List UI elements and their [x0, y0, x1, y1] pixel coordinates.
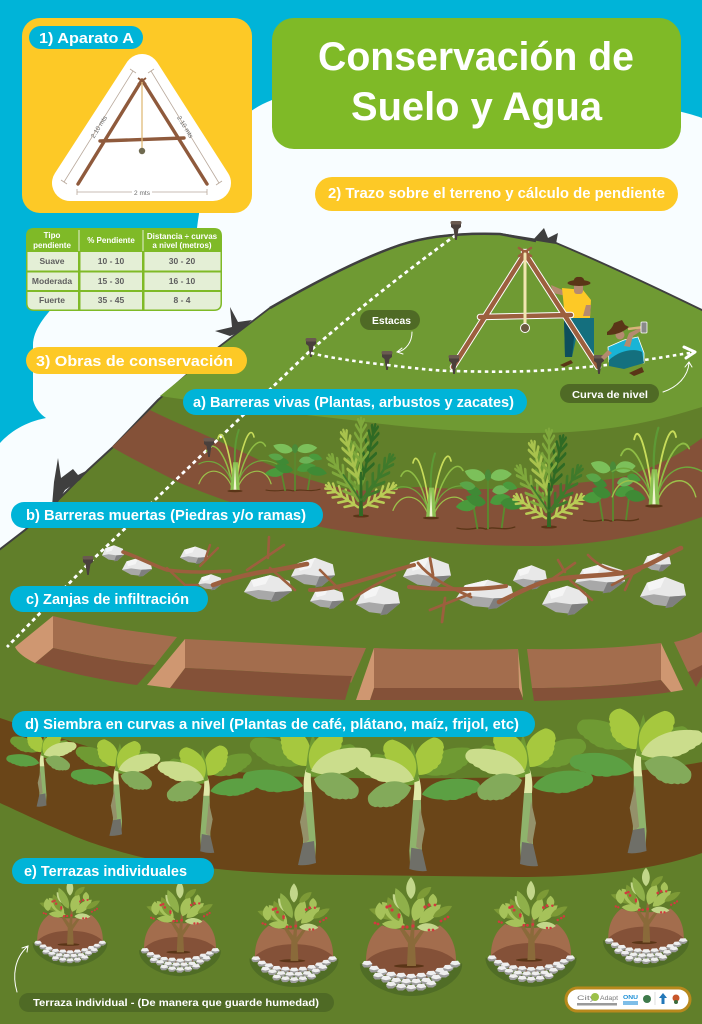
slope table: a nivel (metros) [152, 241, 212, 250]
brown band of live barriers [112, 410, 702, 546]
slope table: 30 - 20 [169, 256, 196, 266]
level curve arrow [311, 347, 695, 372]
heading a pill: a) Barreras vivas (Plantas, arbustos y zacates) [193, 395, 514, 411]
individual terraces with coffee plants [33, 868, 689, 996]
live barrier plants [199, 418, 702, 529]
banana plants row [6, 703, 702, 871]
label Estacas: Estacas [372, 315, 411, 327]
heading pill 1 [29, 26, 143, 49]
label Estacas [360, 310, 420, 330]
heading 3 pill [26, 347, 247, 374]
hillside [0, 228, 702, 1024]
slope table: % Pendiente [87, 236, 135, 245]
heading c pill [10, 586, 208, 612]
heading d pill [12, 711, 535, 737]
slope table: 10 - 10 [98, 256, 125, 266]
slope table: 16 - 10 [169, 276, 196, 286]
partner logos: Adapt [600, 995, 618, 1002]
stakes [82, 221, 462, 575]
slope table: pendiente [33, 241, 71, 250]
slope table: Moderada [32, 276, 72, 286]
label Terraza individual [19, 993, 334, 1012]
label Terraza individual: Terraza individual - (De manera que guarde humedad) [33, 997, 319, 1009]
title panel: Suelo y Agua [351, 85, 603, 129]
A-frame diagram: 2 mts [134, 190, 151, 197]
A-frame diagram: 2.10 mts [90, 114, 109, 140]
heading 2 pill [315, 177, 678, 211]
heading a pill [183, 389, 527, 415]
ridge line [270, 234, 536, 308]
crouching farmer [601, 320, 647, 376]
heading d pill: d) Siembra en curvas a nivel (Plantas de café, plátano, maíz, frijol, etc) [25, 717, 519, 733]
heading e pill [12, 858, 214, 884]
A-frame on hill [453, 248, 598, 367]
infiltration ditches [15, 616, 702, 701]
A-frame diagram [61, 69, 222, 197]
heading 3 pill: 3) Obras de conservación [36, 354, 233, 370]
small annotation arrows [15, 332, 692, 992]
heading c pill: c) Zanjas de infiltración [26, 592, 189, 608]
dark brown planting band [0, 718, 702, 877]
title panel [272, 18, 681, 149]
partner logos [566, 988, 690, 1011]
panel: Aparato A [22, 18, 252, 213]
slope table: 15 - 30 [98, 276, 125, 286]
A-frame diagram: 2.10 mts [175, 115, 195, 140]
white rounded triangle [70, 72, 213, 183]
slope table: 8 - 4 [173, 295, 191, 305]
dead barriers: rocks and branches [102, 537, 686, 622]
slope table: 35 - 45 [98, 295, 125, 305]
heading 2 pill: 2) Trazo sobre el terreno y cálculo de pendiente [328, 185, 665, 202]
slope table: Suave [39, 256, 65, 266]
base dark green slope [0, 234, 702, 1024]
heading e pill: e) Terrazas individuales [24, 864, 187, 880]
slope table: Distancia ÷ curvas [147, 232, 218, 241]
slope table: Tipo [44, 231, 60, 240]
standing farmer [551, 277, 594, 367]
slope table: Fuerte [39, 295, 65, 305]
heading b pill: b) Barreras muertas (Piedras y/o ramas) [26, 508, 306, 524]
label Curva de nivel: Curva de nivel [572, 389, 648, 401]
slope table [26, 228, 222, 311]
stakes at frame feet [448, 355, 604, 374]
title panel: Conservación de [318, 35, 634, 79]
label Curva de nivel [560, 384, 659, 403]
dashed slope line [7, 235, 456, 647]
ridge tufts [52, 228, 558, 506]
heading pill 1: 1) Aparato A [39, 30, 134, 47]
partner logos: ONU [623, 995, 639, 1001]
upper light green terrace [160, 235, 702, 433]
heading b pill [11, 502, 323, 528]
partner logos: City [577, 995, 596, 1002]
